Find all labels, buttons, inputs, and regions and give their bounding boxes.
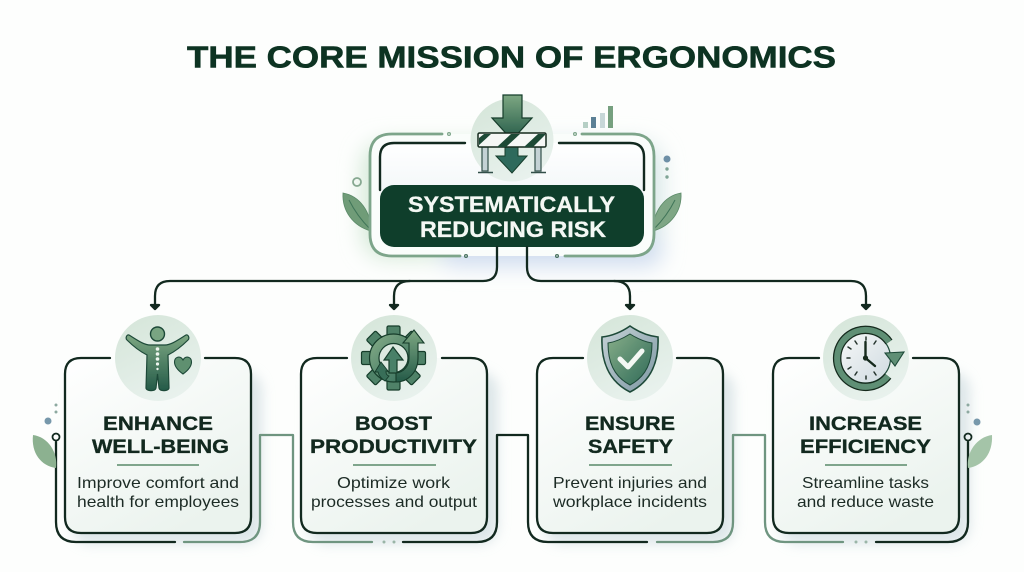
panel: central risk reduction — [343, 95, 681, 266]
card heading: PRODUCTIVITY — [310, 436, 477, 458]
panel: boost productivity — [301, 315, 487, 533]
inner dark frame — [380, 143, 644, 190]
card body — [773, 358, 959, 533]
card body — [537, 358, 723, 533]
card text: Optimize work — [337, 475, 451, 492]
divider — [825, 464, 907, 466]
leaf: left — [343, 193, 371, 231]
icon: person with heart — [115, 315, 201, 401]
icon: small bar chart — [583, 106, 613, 128]
banner heading — [408, 192, 615, 242]
outer linking lines — [52, 434, 972, 542]
title: THE CORE MISSION OF ERGONOMICS — [187, 40, 836, 74]
banner — [380, 185, 644, 247]
panel: enhance well-being — [65, 315, 251, 533]
card heading: INCREASE — [809, 413, 922, 435]
card text — [552, 475, 707, 511]
card text: processes and output — [311, 494, 478, 511]
card text: Prevent injuries and — [553, 475, 707, 492]
card heading — [310, 413, 477, 458]
divider — [589, 464, 672, 466]
card body — [301, 358, 487, 533]
card text: and reduce waste — [797, 494, 934, 511]
card body — [65, 358, 251, 533]
card text — [77, 475, 239, 511]
decorative dots — [353, 156, 670, 186]
card heading — [92, 413, 229, 458]
card heading — [800, 413, 931, 458]
icon: clock with circular arrow — [823, 315, 909, 401]
card text: health for employees — [77, 494, 239, 511]
panel background — [380, 143, 644, 247]
leaf: lower right — [966, 404, 992, 468]
banner heading: REDUCING RISK — [420, 217, 606, 242]
card heading: WELL-BEING — [92, 436, 229, 458]
card text: Improve comfort and — [77, 475, 239, 492]
card text — [797, 475, 934, 511]
card heading: EFFICIENCY — [800, 436, 931, 458]
panel: ensure safety — [537, 315, 723, 533]
card text: workplace incidents — [552, 494, 707, 511]
divider — [117, 464, 199, 466]
icon: shield with check — [587, 315, 673, 401]
small link dots — [382, 540, 868, 544]
icon: barrier with arrows — [470, 95, 554, 182]
banner heading: SYSTEMATICALLY — [408, 192, 615, 217]
card heading: ENSURE — [585, 413, 675, 435]
panel glow — [362, 142, 662, 266]
leaf: lower left — [33, 404, 58, 468]
card heading: SAFETY — [588, 436, 673, 458]
divider — [353, 464, 436, 466]
connector arrows — [151, 247, 870, 309]
card heading: ENHANCE — [103, 413, 213, 435]
outer green frame — [370, 133, 654, 257]
card text: Streamline tasks — [802, 475, 929, 492]
icon: gear with arrows — [351, 315, 437, 401]
panel: increase efficiency — [773, 315, 959, 533]
outer frame fill — [370, 134, 654, 256]
card heading — [585, 413, 675, 458]
card heading: BOOST — [355, 413, 432, 435]
card text — [311, 475, 478, 511]
leaf: right — [653, 193, 681, 231]
card shadows — [72, 372, 970, 544]
